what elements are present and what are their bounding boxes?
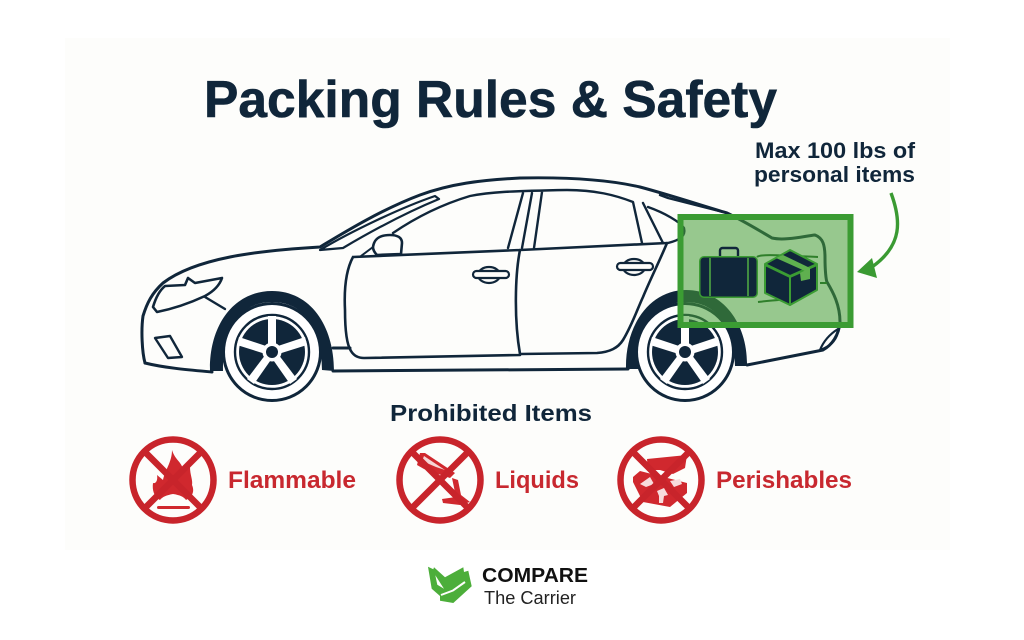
front side window — [393, 190, 642, 248]
front wheel arch — [210, 291, 334, 371]
side mirror — [373, 235, 402, 255]
trunk contour — [757, 255, 827, 302]
car illustration — [142, 178, 840, 372]
label: Liquids — [495, 467, 579, 494]
icon: suitcase — [699, 248, 758, 298]
callout: weight limit: Max 100 lbs of — [755, 138, 916, 163]
fender crease — [205, 297, 225, 309]
icon: prohibition sign — [400, 440, 480, 520]
prohibited: perishables — [620, 440, 852, 520]
fog lamp — [155, 336, 182, 358]
prohibited: flammable — [132, 440, 356, 520]
prohibited: liquids — [400, 440, 579, 520]
icon: prohibition sign — [620, 440, 702, 520]
rear wheel — [626, 290, 747, 400]
logo: compare the carrier — [428, 564, 588, 608]
logo: compare the carrier: The Carrier — [484, 588, 576, 608]
mirror base line — [361, 247, 373, 256]
rear light — [820, 329, 838, 350]
icon: food crate — [633, 455, 687, 507]
car body outline — [142, 178, 840, 365]
windshield strip — [320, 196, 439, 250]
label: Flammable — [228, 467, 356, 494]
front wheel — [210, 291, 334, 400]
arrow to trunk — [857, 193, 898, 278]
label: Perishables — [716, 467, 852, 494]
heading: prohibited items: Prohibited Items — [390, 400, 592, 426]
logo mark — [428, 567, 472, 603]
icon: flame — [153, 450, 193, 500]
quarter window — [643, 195, 727, 243]
wordmark: COMPARE — [482, 564, 588, 587]
rear wheel arch — [626, 290, 747, 369]
callout: weight limit — [754, 138, 916, 187]
rear door handle — [617, 259, 653, 275]
front door handle — [473, 267, 509, 283]
title: Packing Rules & Safety — [204, 71, 777, 129]
callout: weight limit: personal items — [754, 162, 915, 187]
icon: box — [765, 250, 817, 305]
lower body and sill — [145, 348, 628, 372]
icon: prohibition sign — [132, 440, 214, 520]
bottle highlight — [422, 456, 445, 470]
icon: spilled bottle — [417, 453, 470, 505]
belt line and doors — [345, 243, 667, 358]
headlight — [153, 278, 222, 312]
trunk highlight box — [680, 217, 850, 325]
